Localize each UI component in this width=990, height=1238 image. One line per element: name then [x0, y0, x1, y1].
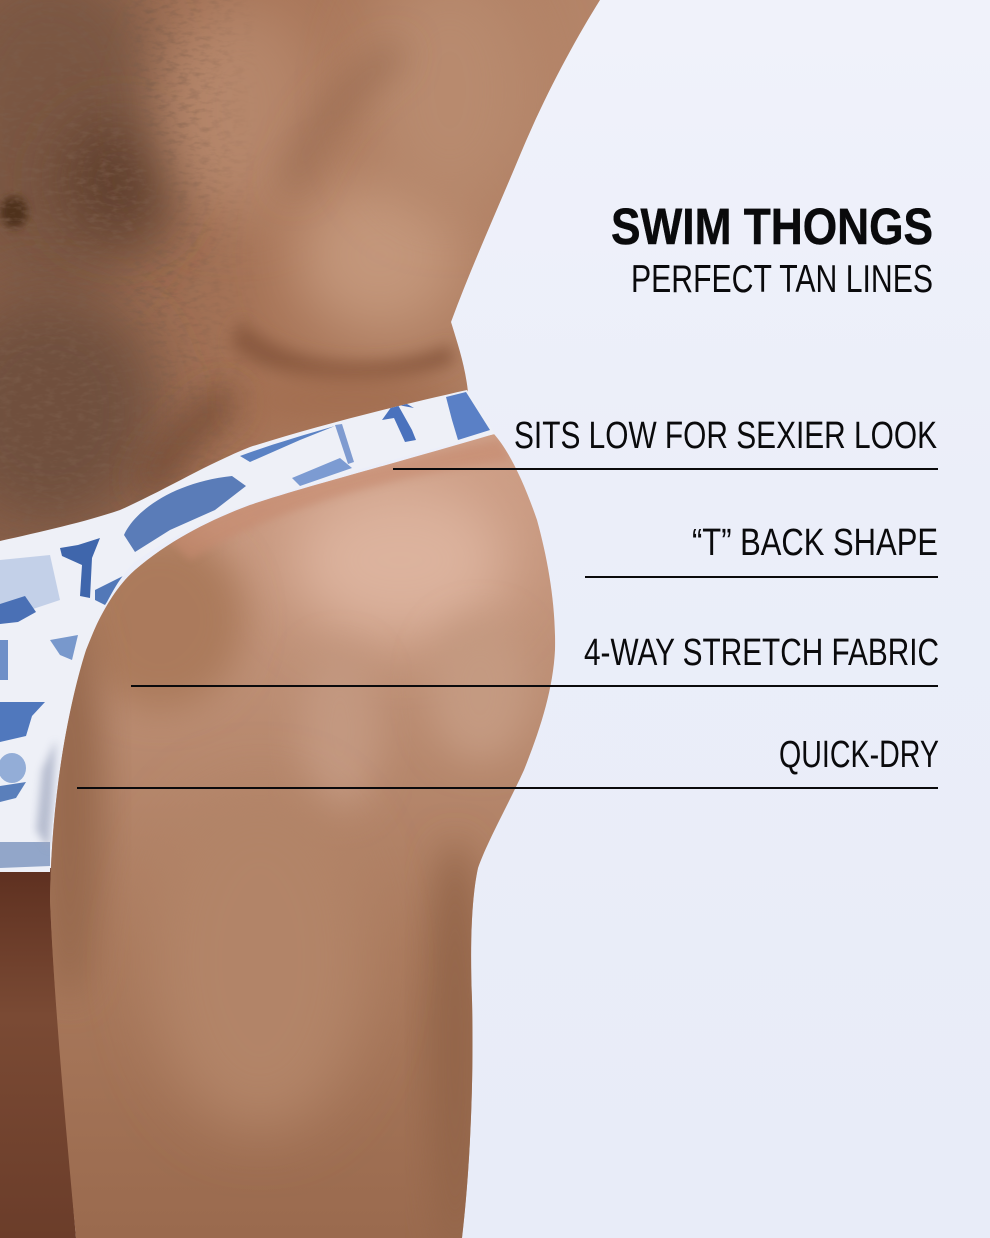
print: building	[446, 392, 490, 440]
print: pole	[335, 424, 354, 464]
figure: thigh and hip	[50, 434, 556, 1238]
title: SWIM THONGS	[611, 198, 933, 255]
figure: rear leg	[0, 868, 76, 1238]
print: wave	[0, 753, 26, 783]
print: lower palm	[60, 538, 100, 598]
print: cruise ship	[124, 476, 246, 552]
swimwear: printed thong	[0, 390, 495, 872]
print: sea	[0, 702, 45, 742]
feature: quick-dry: QUICK-DRY	[779, 734, 939, 776]
print: lower detail	[0, 842, 50, 868]
print: band scene	[292, 458, 352, 486]
print: flamingos and trees	[0, 555, 60, 615]
feature: T back shape: “T” BACK SHAPE	[692, 522, 938, 564]
print: palm tree	[382, 404, 416, 442]
body hair texture	[0, 0, 230, 439]
figure: torso	[0, 0, 620, 560]
